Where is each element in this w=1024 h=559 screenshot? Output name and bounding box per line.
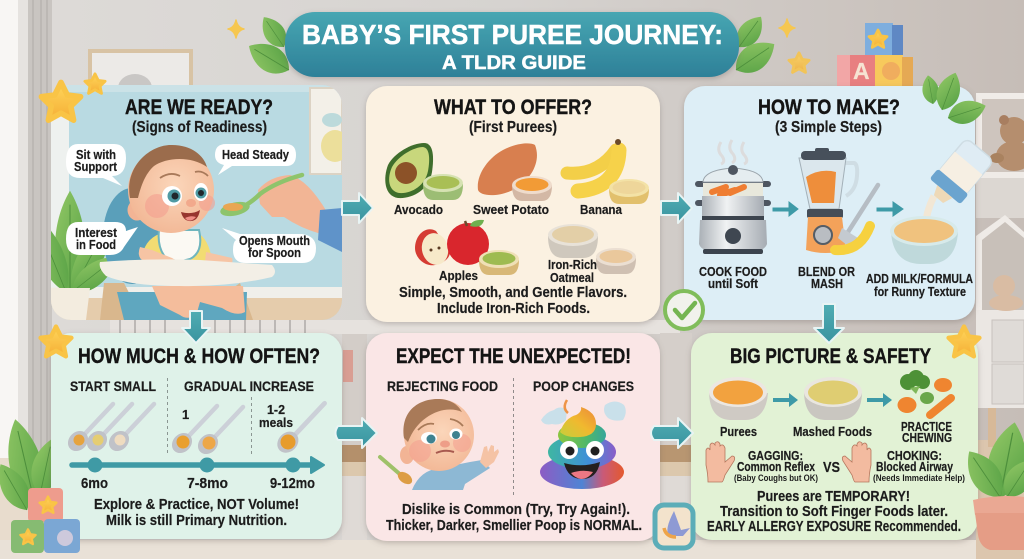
panel note: Include Iron-Rich Foods. [437,301,590,317]
panel: expect the unexpected [366,333,660,541]
bubble: opens mouth for spoon [222,228,316,263]
bubble: interest in food: Interest [75,226,118,240]
title line one: BABY’S FIRST PUREE JOURNEY: [302,19,723,50]
icon: milk bottle and bowl [890,137,996,264]
label: blend or mash: MASH [811,277,843,291]
spoons: 6 months [64,404,154,455]
decoration: toy blocks top right [837,23,913,86]
label: purees: Purees [720,424,757,439]
spoons: 7-8 months [168,406,243,458]
bubble: opens mouth for spoon: Opens Mouth [239,234,310,248]
age timeline [72,457,324,492]
panel: big picture and safety [691,333,978,540]
readiness illustration [51,85,342,320]
callout: gagging: Common Reflex [737,460,815,474]
arrow: offer to make [661,193,692,223]
label: add milk: for Runny Texture [874,285,966,299]
panel note [399,285,627,317]
label: sweet potato: Sweet Potato [473,202,549,217]
arrow: puree to mashed [773,393,798,407]
food: apples [415,220,519,275]
decoration: right plant in pot [957,419,1024,550]
label: cook food: until Soft [708,277,759,291]
arrow: expect to safety [651,418,693,448]
panel note: Transition to Soft Finger Foods later. [720,504,948,520]
subheading: (3 Simple Steps) [775,119,882,136]
icon: hand choking [842,442,871,482]
arrow: readiness to how much [182,311,210,343]
icon: rainbow poop [540,400,626,489]
label: practice chewing [901,420,952,445]
label: start small: START SMALL [70,379,156,394]
arrow: steamer to blender [773,202,798,216]
label: blend or mash: BLEND OR [798,265,855,279]
bubble: sit with support: Sit with [76,148,116,162]
bubble: head steady: Head Steady [222,148,289,162]
panel note: Dislike is Common (Try, Try Again!). [402,502,630,518]
spoons: 9-12 months [259,402,325,457]
title leaves [242,11,782,81]
panel: are we ready [51,85,342,320]
callout: gagging: (Baby Coughs but OK) [734,473,818,484]
panel note: Purees are TEMPORARY! [757,489,910,505]
callout: choking: CHOKING: [887,449,942,463]
decoration: left plant [0,416,65,516]
panel note [386,502,642,534]
food: avocado [385,143,463,200]
panel note: Explore & Practice, NOT Volume! [94,497,299,513]
panel note: Milk is still Primary Nutrition. [106,513,287,529]
arrow: how much to expect [336,418,377,448]
spoons: 9-12 months: 1-2 [267,402,285,417]
age timeline: 9-12mo [270,476,315,492]
icon: puree bowl [709,377,768,420]
subheading: (First Purees) [469,119,557,136]
panel note [94,497,299,529]
label: cook food: COOK FOOD [699,265,767,279]
label: avocado: Avocado [394,202,443,217]
label: add milk [866,272,973,299]
heading: HOW MUCH & HOW OFTEN? [78,345,320,368]
age timeline: 6mo [81,476,108,492]
star: panel six [949,327,979,356]
decoration: bears on shelves [989,115,1024,311]
decoration: toy blocks top right: A [853,58,870,84]
panel card [684,86,975,320]
panel card [691,333,978,540]
panel note [707,489,961,535]
title pill [285,12,739,77]
label: mashed foods: Mashed Foods [793,424,872,439]
spoons: 9-12 months: meals [259,415,293,430]
arrow: mashed to chewing [867,393,892,407]
heading: ARE WE READY? [125,96,273,119]
label: gradual increase: GRADUAL INCREASE [184,379,314,394]
label: iron-rich oatmeal [548,258,597,285]
star: panel four [41,327,71,356]
icon: blender [799,148,878,253]
label: iron-rich oatmeal: Oatmeal [550,271,594,285]
panel card [366,333,660,541]
decoration: sparkles and small star [228,19,809,72]
decoration: leaves on how to make panel [920,69,989,129]
food: iron-rich oatmeal [548,224,636,274]
label: iron-rich oatmeal: Iron-Rich [548,258,597,272]
age timeline: 7-8mo [187,476,228,492]
title banner [242,11,782,81]
panel note: EARLY ALLERGY EXPOSURE Recommended. [707,519,961,535]
bubble: head steady [215,144,296,175]
icon: mashed food bowl [804,377,862,420]
panel: how much and how often [51,333,342,539]
subheading: (Signs of Readiness) [132,119,267,136]
food: sweet potato [478,143,552,201]
panel card [51,333,342,539]
heading: WHAT TO OFFER? [434,96,592,119]
bubble: interest in food: in Food [76,238,116,252]
label: rejecting food: REJECTING FOOD [387,379,498,394]
panel note: Simple, Smooth, and Gentle Flavors. [399,285,627,301]
arrow: blender to bowl [877,202,903,216]
icon: steamer [695,140,771,254]
icon: finger foods [898,370,952,415]
bubble: sit with support [66,144,126,186]
callout: choking: (Needs Immediate Help) [873,473,965,484]
label: blend or mash [798,265,855,291]
decoration: shelves and dresser [976,93,1024,447]
heading: HOW TO MAKE? [758,96,900,119]
bubble: interest in food [66,222,138,255]
arrow: make to safety [814,304,844,343]
star: panel one large [41,82,81,120]
label: cook food [699,265,767,291]
decoration: left toy blocks [11,488,80,553]
label: poop changes: POOP CHANGES [533,379,634,394]
star: panel one small [85,74,105,93]
bubble: sit with support: Support [74,160,118,174]
icon: baby rejecting food [380,399,499,490]
panel: what to offer [366,86,660,322]
spoons: 7-8 months: 1 [182,407,189,422]
callout: gagging [734,449,818,484]
icon: teal tile with toy [655,505,693,548]
icon: green check badge [665,291,703,329]
title line two: A TLDR GUIDE [442,52,586,74]
heading: BIG PICTURE & SAFETY [730,345,931,368]
label: practice chewing: PRACTICE [901,420,952,434]
callout: gagging: GAGGING: [748,449,803,463]
food: banana [567,139,649,204]
label: apples: Apples [439,268,478,283]
panel card [366,86,660,322]
icon: hand gagging [706,442,735,482]
label: add milk: ADD MILK/FORMULA [866,272,973,286]
label: vs: VS [823,459,840,476]
callout: choking: Blocked Airway [876,460,953,474]
arrow: readiness to offer [342,193,373,223]
label: practice chewing: CHEWING [902,431,952,445]
panel: how to make [684,86,996,320]
panel note: Thicker, Darker, Smellier Poop is NORMAL. [386,518,642,534]
heading: EXPECT THE UNEXPECTED! [396,345,631,368]
label: banana: Banana [580,202,623,217]
bubble: opens mouth for spoon: for Spoon [248,246,301,260]
callout: choking [873,449,965,484]
